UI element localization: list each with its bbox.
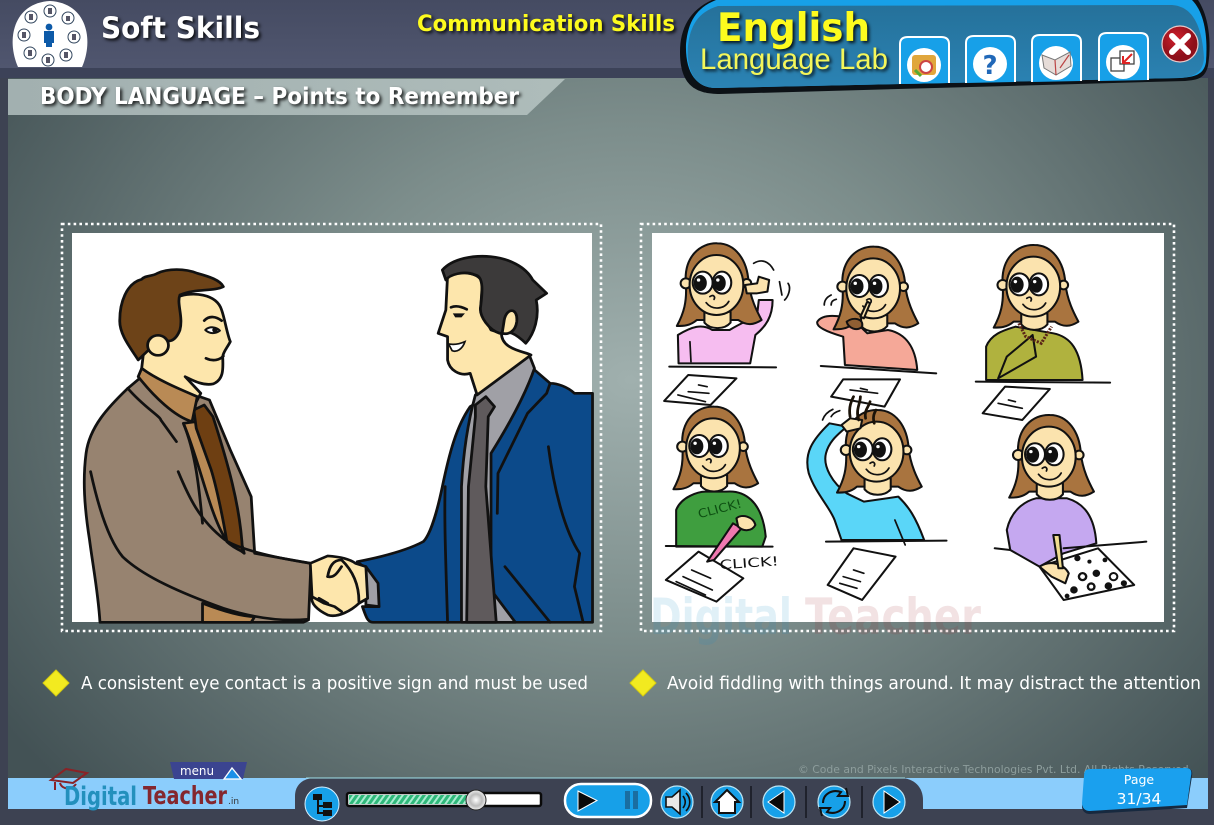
- icon: yellow diamond: [630, 670, 656, 696]
- button: help tab: [966, 36, 1015, 83]
- heading: Communication Skills: Communication Skills: [417, 12, 675, 37]
- logo: Digital Teacher: Teacher: [143, 781, 228, 810]
- button: home: [711, 786, 743, 818]
- figure: clasped hands: [310, 556, 368, 616]
- panel: fiddling illustration: [641, 224, 1174, 631]
- watermark: [650, 588, 981, 646]
- text: click on shirt: CLICK!: [696, 497, 743, 521]
- button: menu: menu: [180, 763, 214, 778]
- heading: Soft Skills: Soft Skills: [101, 11, 260, 45]
- button: refresh: [818, 786, 850, 818]
- text: copyright: © Code and Pixels Interactive Technologies Pvt. Ltd. All Rights Reserved.: [798, 763, 1192, 776]
- footer bar: [0, 762, 1214, 825]
- page counter badge: [1082, 768, 1192, 814]
- figure: man in blue suit: [357, 256, 593, 622]
- button: play and pause: [565, 784, 651, 817]
- button: help tab: ?: [982, 51, 998, 81]
- button: calendar tab: [900, 37, 949, 84]
- text: click on paper: CLICK!: [719, 555, 779, 573]
- button: menu: [170, 762, 247, 779]
- button: book tab: [1032, 35, 1081, 82]
- figure: girl in lilac: [995, 415, 1146, 600]
- title bar: [8, 79, 565, 115]
- figure: girl in olive: [976, 245, 1110, 420]
- figure: girl in pink: [664, 243, 790, 405]
- button: resize tab: [1099, 33, 1148, 81]
- heading: body language: BODY LANGUAGE – Points to Remember: [40, 84, 520, 110]
- button: sound: [661, 786, 693, 818]
- panel: handshake illustration: [62, 224, 601, 631]
- panel: English Language Lab banner: [680, 0, 1210, 94]
- bullet: fiddling: [630, 670, 1201, 696]
- progress slider: [347, 790, 541, 810]
- text: fiddling point: Avoid fiddling with things around. It may distract the attention: [667, 673, 1201, 694]
- watermark: Digital: [650, 588, 792, 646]
- heading: Language Lab: Language Lab: [700, 43, 888, 76]
- heading: English: English: [717, 6, 870, 51]
- icon: soft skills logo: [13, 1, 87, 67]
- figure: man in brown suit: [84, 270, 311, 622]
- figure: girl in green: [666, 407, 779, 602]
- watermark: Teacher: [805, 588, 981, 646]
- icon: yellow diamond: [43, 670, 69, 696]
- button: previous: [763, 786, 795, 818]
- logo: Digital Teacher: Digital: [64, 782, 137, 812]
- text: page number: 31/34: [1117, 790, 1161, 808]
- logo: Digital Teacher: [51, 769, 239, 812]
- button: contents tree: [305, 787, 339, 821]
- button: close: [1162, 26, 1198, 62]
- bullet: eye contact: [43, 670, 588, 696]
- logo: Digital Teacher: .in: [228, 797, 239, 807]
- button: next: [873, 786, 905, 818]
- figure: girl in salmon: [817, 247, 936, 407]
- figure: girl in blue: [807, 397, 947, 600]
- text: eye contact point: A consistent eye contact is a positive sign and must be used: [81, 673, 588, 694]
- text: page label: Page: [1124, 772, 1154, 787]
